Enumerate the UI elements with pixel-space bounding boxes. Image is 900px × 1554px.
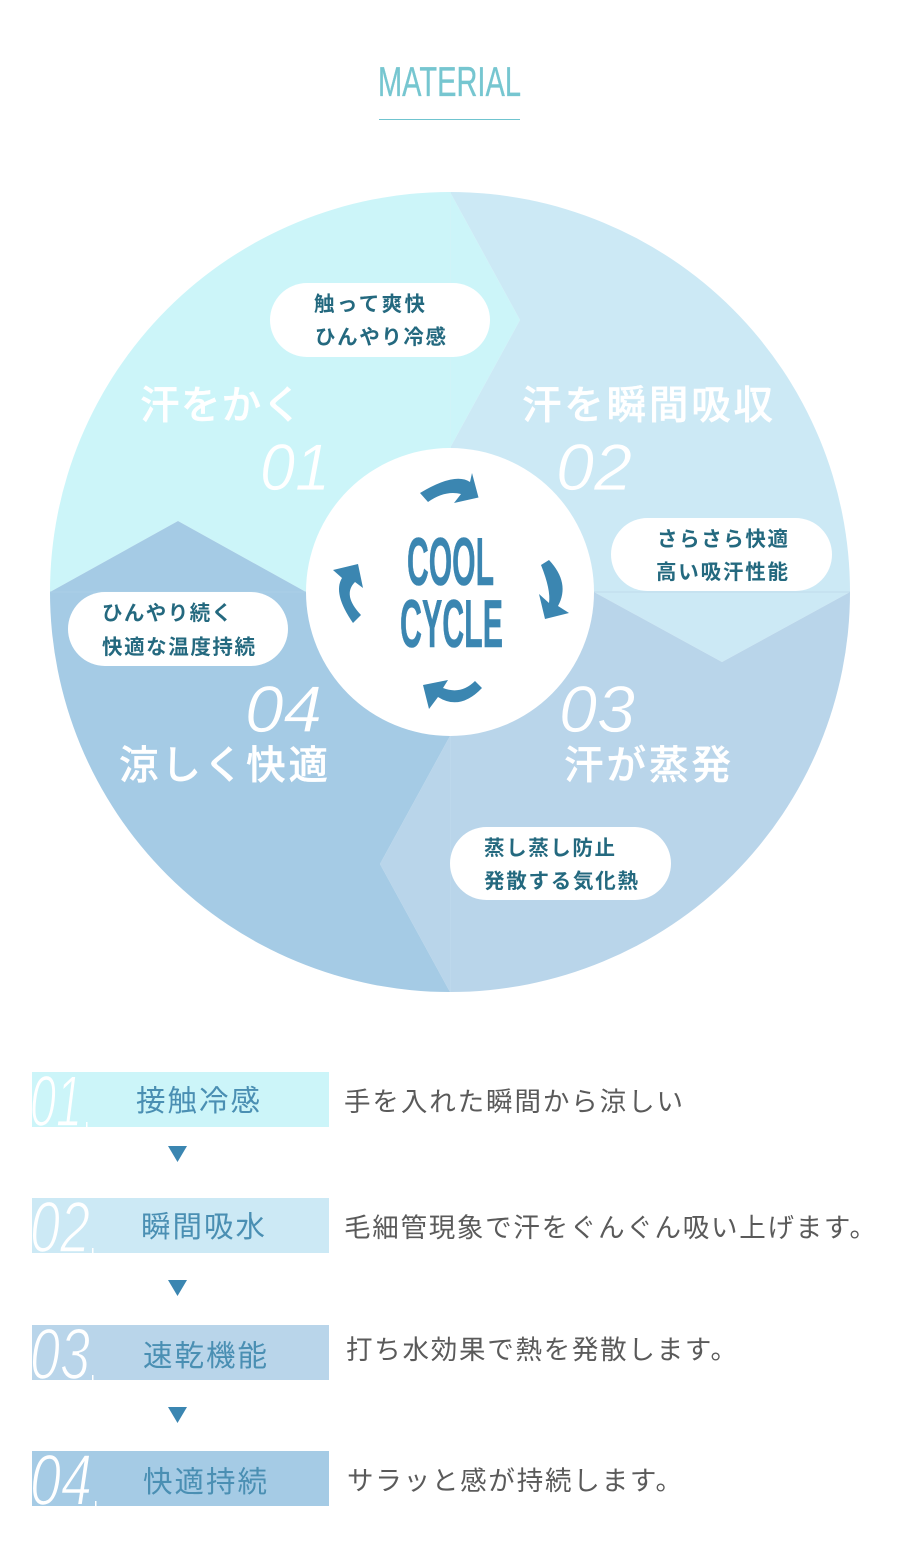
callout: step 2: 高い吸汗性能 <box>656 561 788 584</box>
panel: segment 2 <box>451 192 850 662</box>
number: 03: 03 <box>559 672 635 746</box>
heading: step 2: 汗を瞬間吸収 <box>522 384 773 428</box>
callout: step 3 <box>450 827 671 900</box>
callout: step 1: 触って爽快 <box>314 293 426 316</box>
callout: step 4: ひんやり続く <box>102 602 232 625</box>
heading: step 1: 汗をかく <box>140 384 302 428</box>
icon: left cycle arrow <box>333 564 363 623</box>
number: 01: 01 <box>260 430 330 504</box>
callout: step 4: 快適な温度持続 <box>102 636 256 659</box>
step row 3: 03 <box>30 1315 90 1395</box>
callout: step 1: ひんやり冷感 <box>315 325 446 349</box>
step row 2: 瞬間吸水 <box>141 1211 265 1244</box>
callout: step 4 <box>68 592 288 666</box>
callout: step 2: さらさら快適 <box>657 528 788 551</box>
callout: step 3: 蒸し蒸し防止 <box>484 837 615 860</box>
heading: step 4: 涼しく快適 <box>119 744 328 788</box>
panel: segment 1 <box>50 192 520 592</box>
number: 02: 02 <box>556 430 632 504</box>
step row 1 <box>32 1072 681 1127</box>
icon: top cycle arrow <box>420 473 478 503</box>
icon: right cycle arrow <box>539 560 569 619</box>
cycle diagram: CYCLE <box>400 586 503 662</box>
step row 4: 快適持続 <box>143 1466 267 1499</box>
number: 04: 04 <box>245 672 322 746</box>
step row 1: 手を入れた瞬間から涼しい <box>344 1087 683 1117</box>
panel: segment 4 <box>50 521 450 992</box>
callout: step 2 <box>611 518 832 591</box>
arrow: step 2 to 3 <box>168 1280 187 1296</box>
step row 3: 速乾機能 <box>143 1340 267 1373</box>
step row 1: 01 <box>30 1062 82 1142</box>
center label: cool cycle <box>400 524 503 662</box>
step row 2: 毛細管現象で汗をぐんぐん吸い上げます。 <box>344 1213 876 1243</box>
center circle <box>306 448 594 736</box>
callout: step 1 <box>270 283 490 357</box>
step row 3 <box>32 1325 720 1380</box>
step row 4: サラッと感が持続します。 <box>347 1466 682 1496</box>
step row 4 <box>32 1451 665 1506</box>
title: MATERIAL <box>378 58 521 105</box>
step row 4: 04 <box>30 1441 92 1521</box>
cycle diagram: COOL <box>407 524 494 600</box>
panel: segment 3 <box>380 592 850 992</box>
arrow: step 1 to 2 <box>168 1146 187 1162</box>
step row 2: 02 <box>30 1188 90 1268</box>
step row 2 <box>32 1198 859 1253</box>
icon: bottom cycle arrow <box>423 680 482 709</box>
step row 3: 打ち水効果で熱を発散します。 <box>346 1335 737 1365</box>
cycle diagram <box>50 192 850 992</box>
step row 1: 接触冷感 <box>136 1085 260 1118</box>
arrow: step 3 to 4 <box>168 1407 187 1423</box>
heading: step 3: 汗が蒸発 <box>564 744 731 788</box>
callout: step 3: 発散する気化熱 <box>484 870 638 893</box>
